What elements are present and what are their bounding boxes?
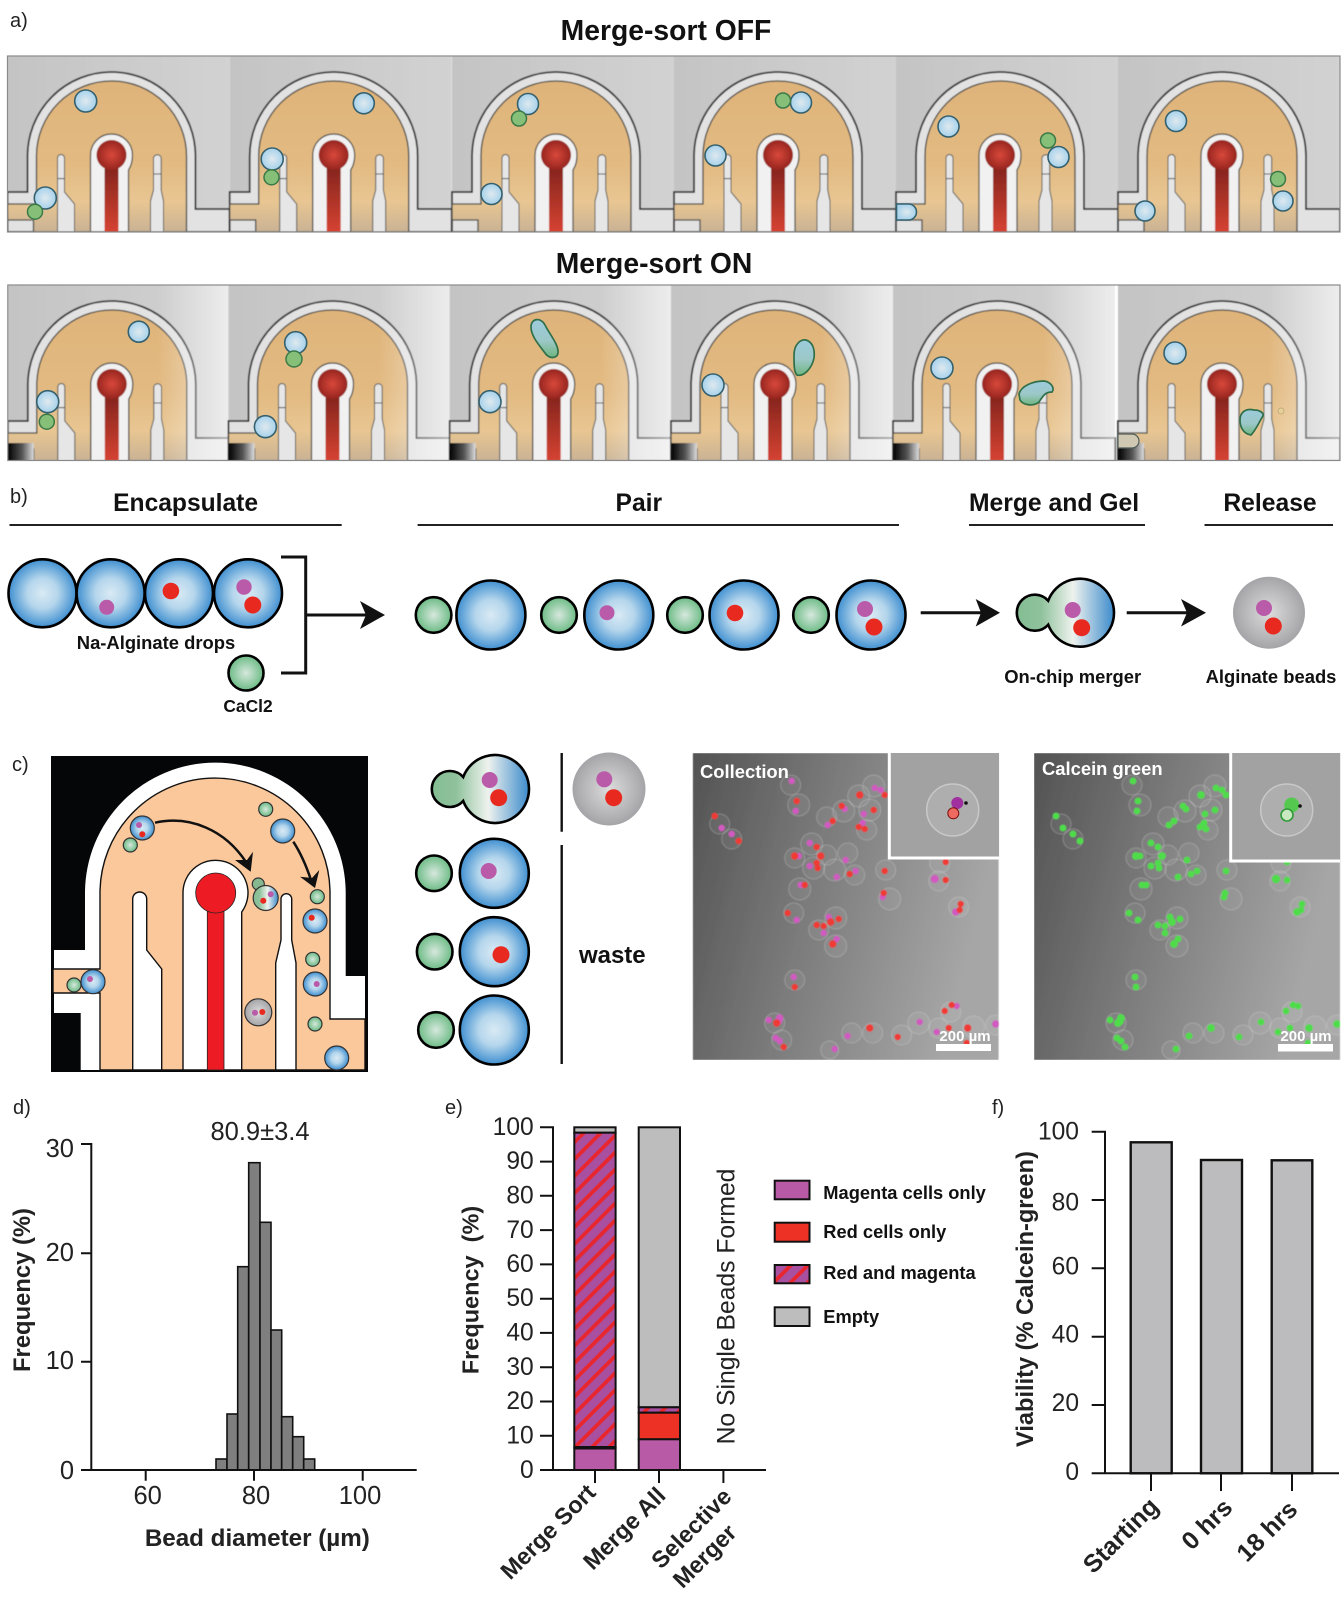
y tick labels: 20 bbox=[506, 1388, 534, 1415]
panel a: merge-sort off image strip bbox=[8, 56, 1340, 232]
panel a: merge-sort on image strip bbox=[8, 285, 1340, 461]
heading: Merge-sort OFF: Merge-sort OFF bbox=[561, 14, 771, 46]
panel f label: f) bbox=[992, 1097, 1004, 1119]
label: Na-Alginate drops: Na-Alginate drops bbox=[77, 632, 235, 653]
x category labels: Merge Sort bbox=[495, 1479, 601, 1584]
y tick labels: 10 bbox=[506, 1422, 534, 1450]
y tick labels: 30 bbox=[506, 1354, 534, 1381]
annotation: mean and SD: 80.9±3.4 bbox=[210, 1118, 310, 1146]
x category labels: Merge All bbox=[578, 1482, 671, 1575]
label: Collection: Collection bbox=[700, 761, 789, 782]
axis tick labels bbox=[46, 1135, 381, 1510]
legend: bead contents: Red and magenta bbox=[823, 1262, 977, 1283]
x category labels: Merger bbox=[668, 1519, 742, 1593]
panel e label: e) bbox=[445, 1097, 463, 1119]
axes bbox=[1092, 1132, 1339, 1491]
scale bar: 200 µm: 200 µm bbox=[939, 1028, 991, 1045]
y tick labels: 60 bbox=[506, 1251, 534, 1278]
arrow: sorted droplet path bbox=[155, 821, 253, 872]
scale bar: 200 µm bbox=[1278, 1028, 1333, 1052]
y tick labels: 90 bbox=[506, 1148, 534, 1175]
on-chip merger droplet bbox=[1017, 579, 1114, 647]
panel e: stacked bar chart bbox=[458, 1114, 766, 1593]
x category labels bbox=[1078, 1492, 1303, 1579]
inset: single bead bbox=[889, 753, 999, 858]
arrow: waste droplet path bbox=[293, 842, 319, 888]
pair row droplets bbox=[416, 580, 906, 650]
heading: Merge and Gel: Merge and Gel bbox=[969, 490, 1139, 517]
bracket and arrow to pair bbox=[281, 557, 385, 673]
CaCl2 droplet bbox=[228, 656, 264, 690]
micrograph: Collection bbox=[693, 753, 1006, 1060]
viability bars bbox=[1131, 1142, 1312, 1473]
y tick labels: 100 bbox=[1038, 1118, 1079, 1145]
annotation: no single beads formed: No Single Beads Formed bbox=[714, 1169, 740, 1444]
scale bar: 200 µm bbox=[936, 1028, 991, 1051]
collected bead bbox=[572, 752, 646, 826]
y tick labels: 80 bbox=[1052, 1190, 1079, 1217]
heading: Encapsulate: Encapsulate bbox=[113, 490, 258, 517]
y tick labels: 40 bbox=[506, 1320, 534, 1346]
droplets on schematic bbox=[67, 802, 349, 1070]
y tick labels bbox=[493, 1114, 534, 1484]
y tick labels: 80 bbox=[506, 1182, 534, 1210]
panel a label: a) bbox=[10, 10, 28, 32]
axis tick labels: 80 bbox=[242, 1482, 270, 1510]
y tick labels: 60 bbox=[1052, 1253, 1079, 1280]
y axis title: Viability (% Calcein-green) bbox=[1013, 1151, 1039, 1447]
label: On-chip merger: On-chip merger bbox=[1004, 666, 1141, 687]
panel d: bead diameter histogram bbox=[9, 1118, 417, 1552]
y tick labels: 100 bbox=[493, 1114, 534, 1141]
panel c: device schematic bbox=[51, 756, 368, 1072]
y tick labels: 70 bbox=[506, 1217, 534, 1244]
merged droplet, sorted bbox=[432, 755, 529, 823]
x axis title: Bead diameter (µm) bbox=[145, 1525, 370, 1552]
divider: collection output bbox=[561, 753, 563, 832]
bar: Merge All bbox=[639, 1127, 680, 1470]
y axis title: Frequency (%) bbox=[9, 1208, 36, 1372]
heading: Release: Release bbox=[1223, 490, 1317, 517]
heading: Pair: Pair bbox=[616, 490, 662, 517]
alginate bead bbox=[1233, 577, 1305, 649]
bar: Merge Sort bbox=[574, 1127, 616, 1470]
inset: viable bead bbox=[1231, 753, 1340, 861]
legend: bead contents bbox=[775, 1181, 987, 1327]
legend: bead contents: Magenta cells only bbox=[823, 1182, 987, 1203]
y tick labels: 50 bbox=[506, 1285, 534, 1312]
legend: bead contents: Red cells only bbox=[823, 1221, 947, 1242]
label: Alginate beads: Alginate beads bbox=[1206, 666, 1336, 687]
histogram bars bbox=[216, 1163, 315, 1470]
arrow: pair to merge bbox=[921, 599, 1000, 626]
y tick labels: 20 bbox=[1052, 1390, 1079, 1417]
x category labels: 0 hrs bbox=[1176, 1493, 1238, 1556]
panel f: viability bar chart bbox=[1013, 1118, 1339, 1579]
y tick labels: 40 bbox=[1052, 1321, 1079, 1348]
x category labels bbox=[495, 1479, 742, 1593]
x category labels: 18 hrs bbox=[1231, 1495, 1303, 1567]
axis tick labels: 100 bbox=[339, 1482, 381, 1510]
panel b label: b) bbox=[10, 486, 28, 508]
divider: waste output bbox=[561, 845, 563, 1064]
heading: Merge-sort ON: Merge-sort ON bbox=[556, 247, 752, 279]
axis tick labels: 0 bbox=[60, 1457, 74, 1485]
panel d label: d) bbox=[13, 1097, 31, 1119]
axes bbox=[540, 1127, 766, 1483]
y tick labels: 0 bbox=[1065, 1459, 1079, 1486]
legend: bead contents: Empty bbox=[823, 1306, 880, 1327]
y tick labels: 0 bbox=[520, 1457, 534, 1484]
axis tick labels: 10 bbox=[46, 1347, 74, 1375]
label: Calcein green: Calcein green bbox=[1042, 758, 1163, 779]
Na-Alginate drops row bbox=[8, 559, 282, 627]
waste droplet pairs bbox=[416, 839, 529, 1064]
heading: Release bbox=[1204, 490, 1333, 525]
arrow: merge to release bbox=[1127, 599, 1206, 626]
y axis title: Frequency (%) bbox=[458, 1206, 484, 1374]
y tick labels bbox=[1038, 1118, 1079, 1486]
x category labels: Starting bbox=[1078, 1492, 1164, 1579]
scale bar: 200 µm: 200 µm bbox=[1280, 1028, 1332, 1045]
x category labels: Selective bbox=[646, 1483, 737, 1574]
axis tick labels: 20 bbox=[46, 1239, 74, 1267]
axis tick labels: 30 bbox=[46, 1135, 74, 1163]
label: waste: waste bbox=[578, 942, 646, 969]
axis tick labels: 60 bbox=[134, 1482, 162, 1510]
axes bbox=[81, 1144, 417, 1481]
label: CaCl2: CaCl2 bbox=[223, 696, 273, 716]
micrograph: Calcein green bbox=[1034, 753, 1344, 1060]
panel c label: c) bbox=[12, 754, 29, 776]
